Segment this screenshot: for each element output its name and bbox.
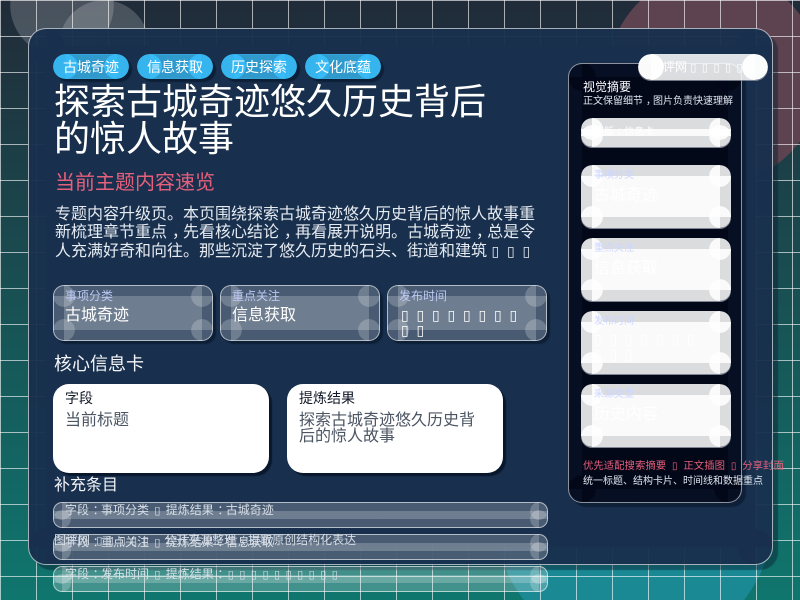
card label: 事项分类	[594, 170, 634, 181]
card label: 发布时间	[594, 316, 634, 327]
field value: 后的惊人故事	[299, 428, 395, 444]
stat label: 事项分类	[65, 289, 113, 303]
stat value: ▯▯▯▯▯▯▯▯	[401, 308, 525, 324]
supplement row 3	[53, 566, 548, 592]
stat card: 事项分类	[53, 285, 213, 341]
badge text: 点评网 ▯▯▯▯▯	[651, 60, 748, 74]
card label: 重点关注	[594, 243, 634, 254]
background circle: bottom cyan	[494, 374, 774, 600]
badge: source top right	[638, 54, 768, 80]
tag: 古城奇迹: 古城奇迹	[63, 59, 119, 75]
card value: 古城奇迹	[594, 187, 658, 204]
sidebar card: 事项分类	[581, 165, 731, 228]
intro paragraph: 新梳理章节重点 ，先看核心结论 ，再看展开说明。古城奇迹 ，总是令	[55, 224, 535, 241]
sidebar card: 发布时间	[581, 311, 731, 374]
tag: 文化底蕴: 文化底蕴	[315, 59, 371, 75]
sidebar description: 正文保留细节 ，图片负责快速理解	[583, 96, 733, 107]
tag: 信息获取	[137, 54, 213, 79]
card value: ▯▯▯	[594, 347, 641, 363]
row text: 字段 ：发布时间 ▯ 提炼结果 ：▯▯▯▯▯▯▯▯▯▯	[65, 567, 343, 581]
subtitle: 当前主题内容速览	[55, 172, 215, 194]
tag: 历史探索: 历史探索	[231, 59, 287, 75]
title: 的惊人故事	[54, 118, 234, 159]
sidebar item: 版式	[581, 118, 731, 147]
stat value: 信息获取	[232, 307, 296, 324]
card value: ▯▯▯▯▯▯▯	[594, 332, 703, 348]
tag: 文化底蕴	[305, 54, 381, 79]
background circle: top right pink	[607, 0, 800, 185]
row text: 字段 ：重点关注 ▯ 提炼结果 ：信息获取	[65, 535, 274, 549]
sidebar card: 来源类型	[581, 384, 731, 447]
info card: 字段	[53, 384, 269, 473]
field key: 提炼结果	[299, 390, 355, 406]
sidebar panel	[568, 63, 742, 503]
field value: 探索古城奇迹悠久历史背	[299, 412, 475, 429]
field key: 字段	[65, 390, 93, 406]
stat card: 发布时间	[387, 285, 547, 341]
background circle: top left inner	[59, 0, 149, 90]
intro paragraph: 专题内容升级页。本页围绕探索古城奇迹悠久历史背后的惊人故事重	[55, 206, 535, 223]
background circle: top left outer	[10, 0, 114, 57]
tag: 古城奇迹	[53, 54, 129, 79]
intro paragraph: 人充满好奇和向往。那些沉淀了悠久历史的石头、街道和建筑 ▯▯▯	[55, 243, 538, 260]
stat card: 重点关注	[220, 285, 380, 341]
stat label: 重点关注	[232, 289, 280, 303]
stat label: 发布时间	[399, 289, 447, 303]
stat value: ▯▯	[401, 323, 432, 339]
sidebar heading: 视觉摘要	[583, 80, 631, 94]
card value: 信息获取	[594, 260, 658, 277]
supplement row 2	[53, 534, 548, 560]
stat value: 古城奇迹	[65, 307, 129, 324]
info card: 提炼结果	[287, 384, 503, 473]
supplement row 1	[53, 502, 548, 528]
sidebar footnote: 统一标题、结构卡片、时间线和数据重点	[583, 476, 763, 487]
tag: 历史探索	[221, 54, 297, 79]
field value	[299, 411, 475, 444]
card value	[594, 333, 703, 363]
heading: supplementary items: 补充条目	[54, 477, 118, 494]
stat value	[401, 308, 525, 339]
field value: 当前标题	[65, 412, 129, 429]
item text: 图版 ：信息卡	[594, 127, 654, 138]
title: 探索古城奇迹悠久历史背后	[54, 81, 486, 122]
topic tags	[53, 54, 384, 82]
heading: core info: 核心信息卡	[54, 354, 144, 374]
tag: 信息获取: 信息获取	[147, 59, 203, 75]
card value: 历史内容	[594, 406, 658, 423]
title	[54, 81, 486, 159]
sidebar card: 重点关注	[581, 238, 731, 301]
sidebar pink note: 优先适配搜索摘要 ▯ 正文插图 ▯ 分享封面	[583, 461, 784, 472]
card label: 来源类型	[594, 389, 634, 400]
source note: 图评网 ▯▯▯▯▯ 公开来源整理 ，提取原创结构化表达	[54, 533, 356, 547]
intro paragraph	[55, 205, 538, 260]
row text: 字段 ：事项分类 ▯ 提炼结果 ：古城奇迹	[65, 503, 274, 517]
